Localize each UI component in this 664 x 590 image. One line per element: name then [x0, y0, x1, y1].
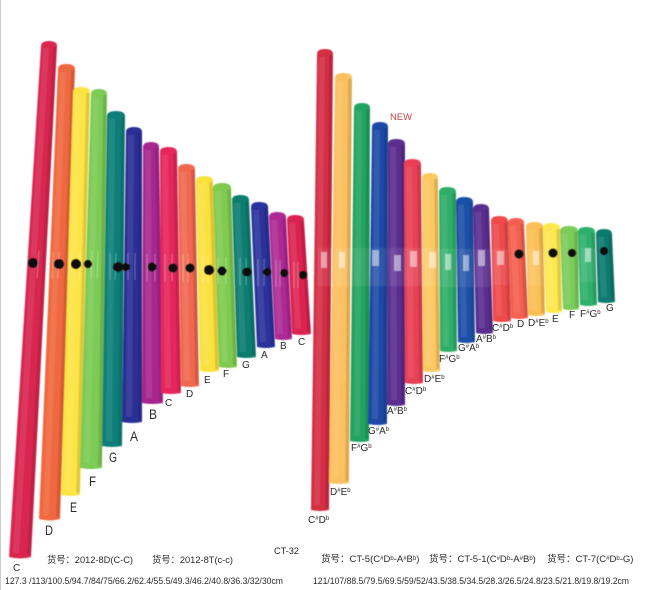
note labels: chromatic set: A — [476, 334, 483, 345]
note labels: chromatic set: D — [416, 386, 423, 397]
note labels: chromatic set: b — [456, 355, 460, 361]
note labels: diatonic set: G — [242, 360, 250, 371]
note labels: diatonic set: A — [130, 428, 139, 444]
tube: D orange — [39, 64, 75, 520]
note labels: chromatic set: b — [347, 488, 351, 494]
note labels: diatonic set: B — [280, 341, 287, 352]
note labels: chromatic set — [308, 303, 614, 526]
panel: diatonic tube set — [9, 41, 311, 558]
note labels: chromatic set: A — [379, 426, 386, 437]
tube: G sharp blue — [368, 122, 388, 425]
note labels: chromatic set: b — [441, 375, 445, 381]
note labels: chromatic set: # — [315, 516, 319, 522]
model code: CT-5-1: B — [523, 554, 529, 565]
model code: CT-5-1: b — [507, 556, 511, 562]
note labels: diatonic set: F — [89, 473, 96, 489]
model code: CT-32: CT-32 — [274, 546, 299, 557]
note labels: chromatic set: F — [580, 309, 586, 320]
tube: B purple — [142, 142, 163, 404]
note labels: chromatic set: # — [376, 427, 380, 433]
note labels: chromatic set: D — [330, 487, 337, 498]
note labels: chromatic set: A — [387, 406, 394, 417]
note labels: diatonic set: C — [165, 398, 172, 409]
model code: CT-5-1: ) — [533, 554, 536, 565]
note labels: chromatic set: C — [405, 386, 412, 397]
tube: B purple — [269, 212, 292, 340]
tube: F sharp green — [578, 227, 597, 306]
tube: A sharp purple — [473, 204, 493, 334]
tube: C red — [160, 147, 181, 394]
model code: CT-7: D — [609, 554, 616, 565]
note labels: chromatic set: C — [308, 515, 315, 526]
note labels: diatonic set: E — [70, 499, 77, 515]
note labels: chromatic set: G — [360, 443, 368, 454]
model code: CT-5-1: # — [520, 556, 524, 562]
note labels: chromatic set: D — [517, 319, 524, 330]
note labels: chromatic set: b — [597, 310, 601, 316]
panel: chromatic tube set — [311, 49, 615, 511]
tube: A blue — [122, 127, 142, 423]
note labels: chromatic set: A — [469, 343, 476, 354]
model code: CT-7: -G) — [620, 554, 633, 565]
note labels: diatonic set: C — [13, 563, 20, 574]
note labels: chromatic set: # — [499, 324, 503, 330]
tube: F sharp green — [439, 187, 457, 352]
model code: CT-5-1: # — [497, 556, 501, 562]
note labels: chromatic set: E — [341, 487, 348, 498]
note labels: chromatic set: G — [368, 426, 376, 437]
tube: G sharp blue — [456, 197, 475, 343]
tube: long C red — [9, 41, 57, 558]
tube: D coral — [178, 164, 199, 387]
note labels: chromatic set: D — [528, 318, 535, 329]
note labels: chromatic set: # — [586, 310, 590, 316]
note labels: chromatic set: # — [466, 344, 470, 350]
label band: diatonic set notation marks — [28, 251, 307, 288]
tube: C sharp coral — [491, 216, 511, 322]
note labels: chromatic set: # — [535, 319, 539, 325]
model code: CT-5: b — [413, 556, 417, 562]
note labels: chromatic set: F — [569, 310, 575, 321]
note labels: chromatic set: G — [589, 309, 597, 320]
note labels: diatonic set — [13, 337, 305, 574]
note labels: chromatic set: D — [503, 323, 510, 334]
model code: CT-5: b — [390, 556, 394, 562]
tube: G teal — [232, 195, 256, 358]
tube: A blue — [251, 202, 275, 348]
callout: NEW: NEW — [390, 112, 413, 122]
model code: CT-5-1: 货号：CT-5-1(C — [429, 554, 497, 565]
model code: CT-5: ) — [416, 554, 419, 565]
note labels: chromatic set: b — [476, 344, 480, 350]
note labels: chromatic set: b — [493, 335, 497, 341]
model code: CT-5: # — [380, 556, 384, 562]
note labels: chromatic set: # — [483, 335, 487, 341]
note labels: diatonic set: E — [204, 375, 211, 386]
note labels: chromatic set: D — [319, 515, 326, 526]
note labels: chromatic set: E — [539, 318, 546, 329]
model code: CT-5: D — [383, 554, 390, 565]
note labels: chromatic set: b — [423, 387, 427, 393]
note labels: chromatic set: E — [552, 314, 559, 325]
model code: 2012-8D: 货号：2012-8D(C-C) — [47, 554, 133, 566]
tube: short C red — [287, 215, 311, 335]
note labels: chromatic set: # — [337, 488, 341, 494]
tube: C sharp red — [404, 159, 423, 384]
note labels: diatonic set: F — [223, 369, 229, 380]
note labels: chromatic set: # — [394, 407, 398, 413]
note labels: chromatic set: b — [510, 324, 514, 330]
tube: F green — [213, 183, 237, 368]
tube: G teal — [596, 229, 615, 303]
note labels: chromatic set: b — [368, 444, 372, 450]
tube: long C sharp red — [311, 49, 333, 511]
tube: E yellow — [61, 87, 90, 496]
lengths: diatonic set: 127.3 /113/100.5/94.7/84/75/66.2/62.4/55.5/49.3/46.2/40.8/36.3/32/30cm — [5, 576, 283, 587]
note labels: chromatic set: B — [486, 334, 493, 345]
note labels: chromatic set: G — [458, 343, 466, 354]
note labels: chromatic set: F — [351, 443, 357, 454]
note labels: chromatic set: C — [492, 323, 499, 334]
model code: CT-7: # — [606, 556, 610, 562]
model code: CT-7: 货号：CT-7(C — [547, 554, 606, 565]
tube: F green — [80, 89, 107, 469]
tube: A sharp purple — [387, 139, 405, 406]
note labels: chromatic set: # — [412, 387, 416, 393]
note labels: diatonic set: D — [45, 522, 53, 538]
note labels: chromatic set: D — [424, 374, 431, 385]
model code: CT-5: # — [403, 556, 407, 562]
note labels: chromatic set: G — [448, 354, 456, 365]
note labels: diatonic set: C — [298, 337, 305, 348]
tube: D coral — [508, 218, 528, 319]
note labels: chromatic set: E — [435, 374, 442, 385]
label band: chromatic set labels — [318, 247, 608, 287]
model code: CT-7: b — [616, 556, 620, 562]
note labels: chromatic set: # — [445, 355, 449, 361]
note labels: chromatic set: b — [404, 407, 408, 413]
tube: F sharp green — [350, 103, 370, 442]
tube: G teal — [102, 111, 125, 447]
note labels: chromatic set: G — [606, 303, 614, 314]
note labels: chromatic set: # — [431, 375, 435, 381]
model code: CT-5-1: D — [500, 554, 507, 565]
tube: E yellow — [196, 176, 219, 372]
note labels: diatonic set: D — [186, 389, 193, 400]
tube: F green — [560, 226, 579, 310]
tube: D sharp amber — [329, 73, 352, 484]
tube: E yellow — [543, 223, 562, 313]
lengths: chromatic set: 121/107/88.5/79.5/69.5/59/52/43.5/38.5/34.5/28.3/26.5/24.8/23.5/21.8/19.8/19.2cm — [313, 576, 629, 587]
model code: CT-5: -A — [394, 554, 404, 565]
tube: D sharp amber — [422, 173, 440, 372]
note labels: diatonic set: B — [149, 406, 157, 422]
note labels: chromatic set: b — [545, 319, 549, 325]
note labels: chromatic set: B — [397, 406, 404, 417]
note labels: diatonic set: A — [261, 350, 268, 361]
model code: 2012-8T: 货号：2012-8T(c-c) — [152, 554, 233, 566]
note labels: chromatic set: b — [386, 427, 390, 433]
model code: CT-5-1: b — [529, 556, 533, 562]
model code: CT-5: B — [407, 554, 413, 565]
note labels: chromatic set: F — [439, 354, 445, 365]
note labels: chromatic set: b — [326, 516, 330, 522]
model code: CT-5: 货号：CT-5(C — [321, 554, 380, 565]
tube: D sharp amber — [526, 222, 545, 316]
note labels: diatonic set: G — [109, 449, 117, 465]
note labels: chromatic set: # — [357, 444, 361, 450]
model code: CT-5-1: -A — [510, 554, 520, 565]
